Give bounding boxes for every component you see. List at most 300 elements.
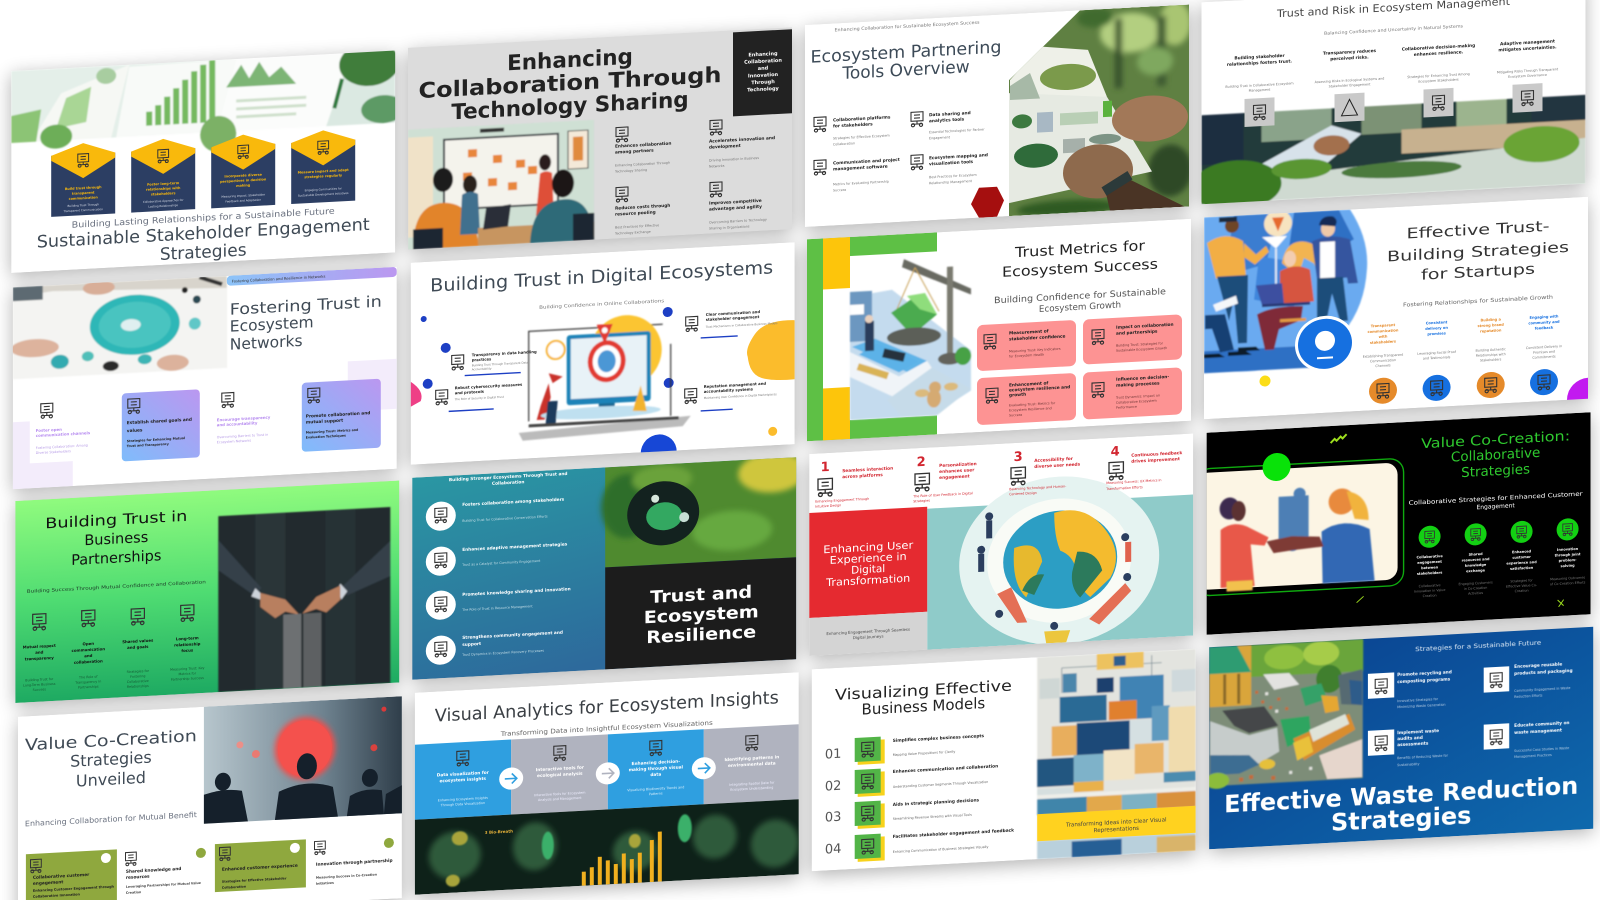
row 04: Enhancing Communication of Business Strategies Visually: [893, 845, 988, 854]
item 2: Enhances adaptive management strategies: [462, 541, 568, 553]
row 01: [825, 731, 984, 767]
metric card 4: Influence on decision-: [1116, 374, 1169, 383]
column 4: Long-term: [176, 635, 199, 641]
metric card 3: [977, 373, 1076, 425]
column 3: Stakeholders: [1480, 357, 1502, 363]
column 1: Collaborative: [1416, 554, 1443, 559]
decorative sparks: [1331, 423, 1564, 619]
panel: Trust Metrics for Ecosystem Success: [807, 219, 1191, 441]
step 2: Strategies: [913, 499, 930, 503]
decorative dots: [1260, 357, 1600, 437]
card 1: [26, 849, 117, 900]
column 3: Strategies for: [127, 669, 150, 674]
black title block: Ecosystem: [644, 602, 759, 628]
illustration: recycling plant and trucks: [1205, 639, 1363, 790]
column 3: data: [650, 772, 661, 778]
metric card 3: Ecosystem Resilience and: [1009, 406, 1052, 413]
title: Trust Metrics for: [1014, 238, 1145, 261]
heading: Building Stronger Ecosystems Through Trust and: [449, 471, 568, 483]
card 2: Creation: [126, 890, 142, 895]
panel: Ecosystem Partnering Tools Overview: [805, 0, 1192, 230]
column 2: and Testimonials: [1423, 355, 1451, 361]
callout card 2: stakeholders: [151, 191, 176, 197]
step 2: [912, 452, 977, 503]
arrow 1: [499, 767, 523, 790]
column 4: Integrating Spatial Data for: [729, 780, 775, 787]
panel: Visual Analytics for Ecosystem Insights: [415, 672, 799, 895]
card: establish shared goals: [122, 389, 200, 461]
column 4: Identifying patterns in: [724, 754, 779, 763]
item: communication and project management: Communication and project: [833, 157, 900, 167]
black title block: Resilience: [646, 622, 756, 648]
item: reduces costs: [614, 185, 670, 236]
item: communication and project management: Success: [833, 188, 847, 193]
item 1: Building Trust for Collaborative Conservation Efforts: [462, 514, 548, 523]
column 2 text: Stakeholder Engagement: [1329, 82, 1371, 89]
item 1: composting programs: [1397, 676, 1451, 685]
column 2: Partnerships: [78, 685, 99, 690]
column 2: ecological analysis: [537, 771, 583, 779]
item: encourage transparency: Encourage transparency: [217, 415, 271, 422]
column 4: [170, 604, 204, 682]
photo: green gauge in foliage: [601, 451, 806, 568]
header pill: [227, 267, 397, 286]
metric card 1: Measuring Trust: Key Indicators: [1009, 347, 1061, 354]
item 2: [426, 540, 568, 576]
card 4: Innovation through partnership: [316, 858, 393, 868]
subtitle: Collaborative Strategies for Enhanced Customer: [1409, 491, 1583, 507]
column 2: Open: [83, 641, 94, 646]
column 2 text: perceived risks.: [1330, 54, 1369, 62]
arrow 3: [692, 757, 716, 780]
card 1: Collaborative Innovation: [33, 892, 81, 899]
title: [230, 293, 382, 354]
column 4: Measuring Trust: Key: [170, 666, 204, 672]
column 1: Collaborative: [1419, 583, 1441, 588]
item: data sharing: analytics tools: [929, 116, 965, 124]
photo: forest with data bars: 3 Bio-Breath: [485, 828, 513, 835]
card 2: resources: [126, 874, 150, 881]
item: accelerates innovation: Networks: [709, 164, 725, 169]
metric card 2: Sustainable Ecosystem Growth: [1116, 346, 1167, 353]
metric card 2: [1083, 314, 1182, 365]
item 1: [1368, 669, 1452, 711]
subtitle: Building Confidence for Sustainable: [994, 287, 1166, 306]
title: Tools Overview: [841, 57, 970, 84]
title: [835, 677, 1012, 720]
callout card 4: [291, 129, 355, 204]
callout card 3: [211, 133, 275, 208]
callout card 1: communication: [69, 195, 98, 201]
column 4: Commitments: [1532, 355, 1556, 360]
column 4 text: Adaptive management: [1500, 38, 1555, 47]
callout card 4: Engaging Communities for: [305, 186, 343, 192]
arrow 2: [596, 762, 620, 785]
icon box 2: [1334, 93, 1364, 122]
title: Visualizing Effective: [835, 677, 1012, 704]
heading: [449, 471, 568, 489]
decorative lilac blocks: [13, 359, 397, 489]
column 3: [608, 729, 704, 809]
title: Sustainable Stakeholder Engagement: [37, 215, 370, 253]
column 2: Activities: [1468, 591, 1483, 596]
column 3: satisfaction: [1510, 566, 1534, 571]
title: [45, 509, 187, 570]
column 3: making through visual: [629, 764, 684, 773]
item: improves competitive advantage: Sharing in Organizations: [709, 224, 750, 231]
step 2: enhances user: [939, 467, 975, 475]
column 2: exchange: [1466, 568, 1486, 573]
card 2: Leveraging Partnerships for Mutual Value: [126, 881, 201, 889]
item 3: [426, 584, 571, 620]
metric card 1: for Ecosystem Health: [1009, 353, 1044, 359]
step 3: Centered Design: [1009, 491, 1037, 496]
column 1: stakeholders: [1417, 571, 1442, 576]
column 4: Partnership Success: [171, 676, 204, 682]
item: transparency: practices: [472, 356, 492, 362]
icon box 3: [1424, 88, 1454, 117]
step 4: Transformation Efforts: [1105, 485, 1143, 491]
row 04: [825, 826, 1014, 864]
column 1: engagement: [1417, 560, 1442, 565]
item: clear communication: [686, 308, 778, 339]
photo: silhouettes and red sphere: [204, 696, 402, 824]
title: Enhancing: [507, 45, 633, 76]
column 1: Long-Term Business: [23, 682, 56, 688]
card: establish shared goals: Strategies for Enhancing Mutual: [127, 436, 185, 443]
card 2: Shared knowledge and: [126, 866, 181, 875]
decorative red hexagon: [971, 186, 1004, 218]
red title block: Experience in: [830, 551, 907, 567]
title: [1224, 772, 1578, 842]
column 4: Ecosystem Understanding: [730, 786, 773, 792]
card 1: Enhancing Customer Engagement through: [33, 885, 115, 893]
card: promote collaboration: mutual support: [306, 418, 343, 426]
column 1 text: Building Trust in Collaborative Ecosystem: [1225, 81, 1294, 89]
step 3: Balancing Technology and Human-: [1009, 484, 1067, 491]
column 3: Effective Value Co-: [1506, 583, 1538, 589]
metric card 1: stakeholder confidence: [1009, 333, 1066, 343]
black side box: [733, 29, 792, 116]
title: [1387, 218, 1569, 286]
item: communication and project management: Metrics for Evaluating Partnership: [833, 180, 889, 187]
card 3: Strategies for Effective Stakeholder: [222, 876, 287, 884]
item: improves competitive advantage: Overcoming Barriers to Technology: [709, 218, 767, 225]
column 4: solving: [1561, 564, 1575, 568]
column 4: [1526, 314, 1562, 396]
column 2: [511, 734, 608, 815]
row 04: Facilitates stakeholder engagement and feedback: [893, 827, 1014, 840]
item: foster open communication: [36, 401, 91, 455]
column 1 text: Building stakeholder: [1234, 53, 1285, 62]
column 4: [1550, 517, 1586, 586]
column 1: Through Data Visualization: [440, 801, 485, 807]
column 4: focus: [181, 647, 194, 653]
item: data sharing: Data sharing and: [929, 110, 971, 118]
black title block: [605, 557, 796, 669]
step 4: drives improvement: [1131, 456, 1180, 465]
title: Building Strategies: [1387, 240, 1569, 266]
subtitle: Ecosystem Growth: [1039, 301, 1121, 315]
item 3: Promotes knowledge sharing and innovation: [462, 586, 571, 598]
panel: Enhancing User Experience in Digital Transformation: [809, 433, 1193, 658]
item: encourage transparency: Ecosystem Networks: [217, 439, 251, 444]
item: reduces costs: Technology Exchange: [614, 230, 651, 236]
item: reputation: Reputation management and: [704, 381, 766, 389]
column 2: in Co-Creation: [1464, 586, 1487, 591]
item 3: [1368, 727, 1449, 769]
panel: Trust and Risk in Ecosystem Management: [1192, 0, 1586, 213]
column 3 text: [1402, 43, 1475, 85]
step 2: 2: [917, 455, 926, 470]
title: Unveiled: [76, 768, 146, 791]
title: Ecosystem Success: [1002, 257, 1158, 281]
card: establish shared goals: values: [127, 427, 143, 434]
item: encourage transparency: [217, 391, 271, 444]
item: transparency: Building Trust Through Transparent Data: [472, 360, 528, 367]
black side box: Enhancing: [748, 51, 778, 59]
callout card 2: Lasting Relationships: [148, 203, 179, 209]
callout card 2: relationships with: [146, 186, 181, 192]
item 3: Implement waste: [1397, 728, 1439, 736]
item: collaboration platforms: Collaboration platforms: [833, 114, 891, 124]
subtitle: Enhancing Collaboration for Mutual Benefit: [25, 810, 197, 828]
column 2: Engaging Customers: [1458, 580, 1493, 586]
column 4: community and: [1528, 320, 1560, 325]
column 1: stakeholders: [1370, 340, 1396, 345]
column 1: Communication: [1370, 358, 1396, 363]
item: reputation: [685, 380, 777, 412]
column 1: Enhancing Ecosystem Insights: [438, 796, 488, 802]
icon box 1: [1244, 97, 1274, 127]
panel: Sustainable Stakeholder Engagement Strategies: [11, 40, 405, 273]
subtitle: Building Lasting Relationships for a Sustainable Future: [72, 207, 335, 231]
row 02: Understanding Customer Segments Through Visualization: [893, 780, 988, 789]
title: Strategies: [70, 748, 152, 771]
item 3: assessments: [1397, 741, 1429, 748]
card 2: [126, 848, 206, 895]
item: reputation: accountability systems: [704, 386, 754, 394]
callout card 3: Measuring Impact: Stakeholder: [221, 192, 266, 199]
item: collaboration platforms: [813, 116, 890, 146]
illustration: collage of city and data blocks: [1037, 649, 1196, 859]
heading: Collaboration: [492, 479, 524, 487]
frame blocks: [807, 232, 937, 441]
callout card 1: [51, 141, 115, 217]
column 2: Leveraging Social Proof: [1417, 350, 1457, 356]
column 1: Creation: [1423, 593, 1437, 598]
metric card 2: and partnerships: [1116, 329, 1158, 337]
item: accelerates innovation: [709, 117, 775, 169]
column 2: Interactive Tools for Ecosystem: [534, 791, 585, 797]
callout card 1: Transparent Communication: [62, 207, 103, 213]
step 1: Enhancing Engagement Through: [815, 497, 869, 504]
column 4 text: Ecosystem Governance: [1508, 73, 1547, 79]
metric card 3: Evaluating Trust: Metrics for: [1009, 401, 1056, 408]
panel: Building Trust in Digital Ecosystems: [411, 242, 795, 484]
title: for Startups: [1421, 262, 1535, 284]
column 1: ecosystem insights: [440, 776, 487, 784]
item: communication and project management: management software: [833, 164, 888, 173]
step 2: engagement: [939, 473, 970, 481]
column 4: Measuring Outcomes: [1550, 575, 1585, 581]
header pill: Fostering Collaboration and Resilience in Networks: [232, 275, 326, 284]
column 4 text: [1497, 38, 1559, 80]
column 3: Building a: [1481, 317, 1501, 323]
title: Collaborative: [1451, 445, 1540, 466]
column 3 text: Collaborative decision-making: [1402, 43, 1475, 53]
callout card 3: Incorporate diverse: [224, 173, 263, 179]
title: Value Co-Creation: [25, 726, 197, 754]
callout card 3: perspectives in decision: [220, 177, 267, 184]
item: cybersecurity: The Role of Security in Digital Trust: [454, 395, 505, 401]
column 4: feedback: [1535, 326, 1554, 331]
item 3: audits and: [1397, 735, 1423, 742]
column 1: Building Trust for: [25, 677, 54, 682]
column 1: transparency: [25, 655, 54, 661]
title: Visual Analytics for Ecosystem Insights: [435, 688, 779, 727]
illustration: people around globe: [927, 469, 1193, 652]
item 2: Trust as a Catalyst for Community Engagement: [461, 559, 541, 567]
step 1: Seamless interaction: [842, 466, 893, 474]
title: [1421, 428, 1570, 483]
column 3: customer: [1512, 555, 1531, 560]
title: Strategies: [1461, 461, 1530, 481]
column 2: resources and: [1462, 557, 1490, 563]
red title block: Digital: [851, 563, 885, 577]
column 1 text: Management: [1249, 88, 1271, 93]
card: promote collaboration: Measuring Trust: Metrics and: [306, 428, 359, 435]
title: Partnerships: [71, 548, 161, 569]
title: Strategies: [1331, 801, 1471, 837]
callout card 4: strategies regularly: [304, 173, 343, 179]
item: accelerates innovation: development: [709, 143, 741, 151]
column 4: Metrics for: [179, 671, 197, 676]
panel: Building Trust in Business Partnerships: [15, 480, 399, 703]
metric card 1: [977, 320, 1076, 371]
black side box: Through: [751, 79, 775, 86]
item: improves competitive advantage: [709, 180, 767, 231]
item: foster open communication: Fostering Collaboration: Among: [36, 443, 88, 450]
column 3: [1506, 520, 1538, 594]
item: ecosystem mapping: [911, 151, 988, 186]
illustration: laptop with target: [519, 312, 691, 441]
title: Value Co-Creation:: [1421, 428, 1570, 452]
card 4: Initiatives: [316, 881, 334, 886]
column 3: strong brand: [1478, 323, 1504, 328]
card 1: Collaborative customer: [33, 872, 90, 881]
column 2: [1417, 320, 1457, 402]
row 01: 01: [825, 747, 841, 763]
metric card 1: Measurement of: [1009, 328, 1049, 337]
item: foster open communication: Foster open: [36, 427, 62, 433]
title: [812, 40, 1000, 79]
title: Business Models: [862, 694, 985, 719]
column 2 text: Assessing Risks in Ecological Systems and: [1315, 77, 1384, 84]
metric card 4: Trust Dynamics: Impact on: [1115, 393, 1160, 400]
item: communication and project management: [814, 156, 900, 194]
title: Business: [84, 530, 148, 549]
metric card 4: [1083, 367, 1182, 420]
column 1: [1414, 525, 1445, 599]
column 1: Channels: [1375, 363, 1391, 368]
column 3: Relationships: [127, 684, 149, 689]
column 2: The Role of: [78, 675, 98, 680]
column 1: and: [35, 649, 44, 655]
item: ecosystem mapping: Ecosystem mapping and: [929, 152, 988, 161]
item: reputation: Maintaining User Confidence in Digital Marketplaces: [704, 392, 777, 400]
item: improves competitive advantage: Improves competitive: [709, 198, 762, 207]
item: reduces costs: resource pooling: [615, 209, 656, 218]
column 2: promises: [1427, 331, 1446, 336]
item: clear communication: Trust Mechanisms in Collaborative Business Models: [705, 321, 778, 329]
column 4: Consistent Delivery in: [1526, 344, 1562, 350]
item: clear communication: stakeholder engagement: [706, 314, 759, 322]
column 1: Success: [33, 687, 46, 692]
grey subtitle block: Enhancing Engagement Through Seamless: [826, 627, 910, 636]
title: Collaboration Through: [418, 63, 722, 104]
panel: Effective Trust-Building Strategies for Startups: [1204, 193, 1600, 440]
subtitle: Fostering Relationships for Sustainable Growth: [1403, 295, 1553, 309]
callout card 3: making: [236, 183, 251, 188]
item: encourage transparency: Overcoming Barriers to Trust in: [217, 433, 268, 439]
illustration: scale and coins: [850, 256, 971, 420]
column 1: [1363, 323, 1404, 405]
column 3: Creation: [1515, 589, 1529, 593]
callout card 3: Feedback and Adaptation: [225, 198, 261, 204]
item 1: Fosters collaboration among stakeholders: [462, 497, 565, 508]
item: transparency: [452, 349, 537, 377]
metric card 2: Impact on collaboration: [1116, 322, 1174, 331]
card 3: Collaboration: [222, 884, 247, 890]
title: Effective Trust-: [1406, 219, 1550, 242]
item: cybersecurity: and protocols: [455, 389, 485, 395]
item 4: Strengthens community engagement and: [462, 630, 563, 641]
illustration: team at whiteboard: [408, 120, 594, 250]
callout card 4: Measure impact and adapt: [298, 168, 349, 175]
step 2: The Role of User Feedback in Digital: [912, 491, 973, 498]
column 3: Enhancing decision-: [632, 759, 680, 767]
item: accelerates innovation: Accelerates innovation and: [709, 135, 775, 145]
column 3: Shared values: [122, 638, 154, 644]
yellow caption band: [1037, 806, 1196, 841]
row 03: Aids in strategic planning decisions: [893, 797, 980, 808]
column 2: Interactive tools for: [536, 765, 585, 773]
column 1 text: relationships fosters trust.: [1227, 58, 1292, 68]
title: Fostering Trust in: [230, 293, 382, 319]
item: cybersecurity: Robust cybersecurity measures: [455, 382, 523, 390]
step 2: Personalization: [939, 461, 977, 469]
column 1: Mutual respect: [23, 643, 56, 650]
item 3: Benefits of Reducing Waste for: [1397, 754, 1449, 760]
card 1: engagement: [33, 879, 63, 887]
item: data sharing: Engagement: [929, 135, 951, 140]
column 1: communication: [1368, 328, 1399, 334]
step 4: 4: [1111, 444, 1120, 460]
column 3 text: Strategies for Enhancing Trust Among: [1407, 72, 1470, 79]
panel: Effective Waste Reduction Strategies: [1205, 627, 1593, 850]
column 3: Visualizing Biodiversity Trends and: [627, 785, 684, 792]
item: cybersecurity: [436, 382, 523, 413]
item 2: products and packaging: [1514, 668, 1573, 677]
item 4: [1484, 720, 1570, 761]
step 1: across platforms: [842, 472, 883, 480]
yellow caption band: Transforming Ideas into Clear Visual: [1065, 817, 1167, 829]
card 4: Measuring Success in Co-Creation: [316, 872, 378, 880]
title: Building Trust in Digital Ecosystems: [430, 257, 773, 297]
step 3: diverse user needs: [1034, 462, 1081, 470]
column 4: Engaging with: [1529, 314, 1559, 320]
